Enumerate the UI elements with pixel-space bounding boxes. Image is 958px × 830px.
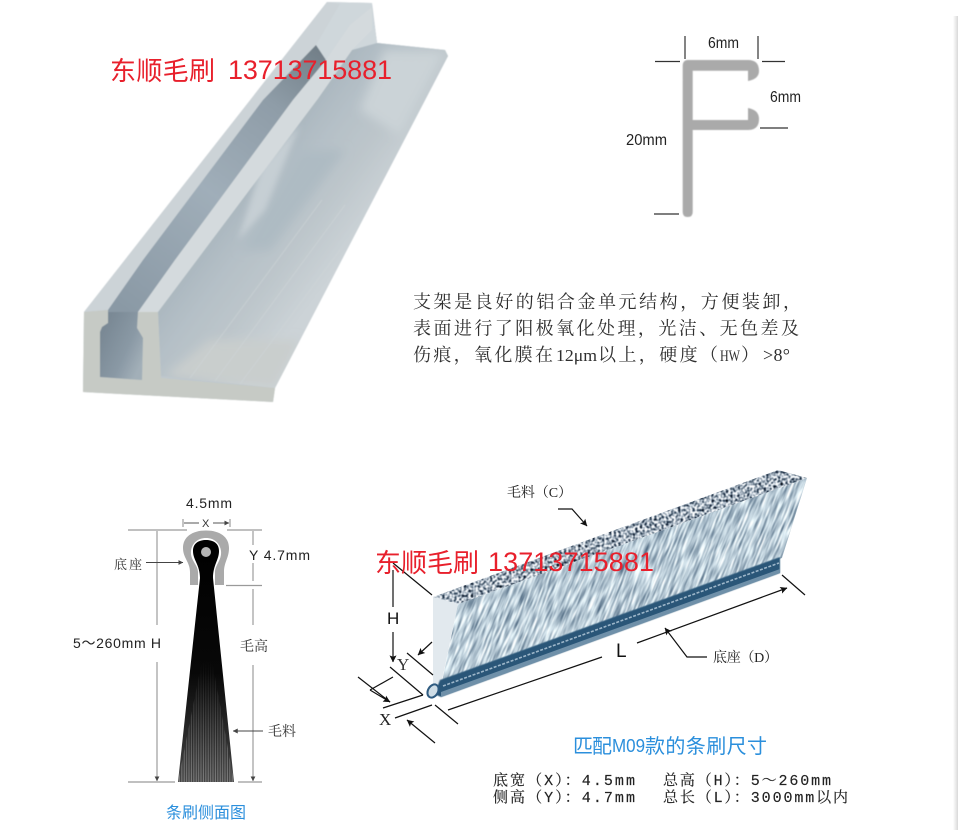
spec title: M09 bbox=[612, 736, 645, 756]
H value label: 5～260mm H bbox=[73, 635, 161, 651]
H label: H bbox=[387, 609, 399, 628]
pale streak bbox=[241, 130, 298, 234]
F-profile dimension diagram bbox=[626, 35, 801, 217]
F profile shape bbox=[683, 60, 759, 217]
20mm label: 20mm bbox=[626, 132, 667, 149]
H dimension line bbox=[156, 531, 158, 781]
dark band beside rail bbox=[256, 154, 334, 246]
Y label: Y bbox=[397, 655, 409, 674]
red watermark top: 东顺毛刷 bbox=[110, 56, 215, 86]
bristle material label: 毛料（C） bbox=[507, 485, 572, 501]
bristle strands bbox=[178, 672, 233, 782]
bristle height label: 毛高 bbox=[240, 638, 268, 655]
bristle label: 毛料 bbox=[268, 724, 296, 740]
Y value label: Y 4.7mm bbox=[249, 547, 310, 563]
red watermark top: 13713715881 bbox=[228, 55, 392, 85]
spec title: 款的条刷尺寸 bbox=[645, 735, 767, 758]
X lower arrow bbox=[407, 720, 435, 743]
rail lower band bbox=[441, 569, 780, 697]
strip assembly bbox=[426, 470, 807, 699]
spec table bbox=[493, 771, 848, 807]
base leader bbox=[665, 628, 707, 657]
spec title: 匹配 bbox=[573, 736, 612, 758]
red watermark bottom: 东顺毛刷 bbox=[375, 548, 479, 578]
end side face bbox=[433, 597, 458, 688]
far ridge bbox=[293, 2, 377, 100]
extension lines bbox=[128, 530, 262, 782]
line 3: 以上，硬度（ bbox=[598, 345, 718, 365]
line 2: 表面进行了阳极氧化处理，光洁、无色差及 bbox=[413, 318, 799, 338]
Y arrow bbox=[418, 642, 432, 655]
image: aluminium bracket profile bbox=[83, 2, 448, 402]
X label: X bbox=[379, 710, 391, 729]
line 3: HW bbox=[720, 348, 741, 365]
X width dimension: X bbox=[202, 518, 210, 530]
bristle arrow bbox=[558, 509, 587, 526]
H dimension bbox=[392, 570, 394, 662]
line 3: >8° bbox=[763, 345, 790, 365]
perspective brush strip diagram bbox=[358, 470, 807, 744]
rod hole bbox=[201, 547, 211, 557]
line 1: 支架是良好的铝合金单元结构，方便装卸， bbox=[413, 292, 801, 312]
channel slot bbox=[108, 45, 326, 324]
line 3: 伤痕，氧化膜在 bbox=[413, 345, 553, 365]
silhouette bbox=[83, 2, 448, 402]
length lines bbox=[190, 200, 345, 384]
front end face bbox=[83, 310, 275, 402]
end cap bbox=[425, 682, 441, 700]
total height spec: 总高（H）：5～260mm bbox=[663, 771, 831, 790]
cavity bbox=[100, 312, 143, 380]
L label: L bbox=[616, 641, 627, 662]
rail highlight bbox=[443, 563, 779, 686]
wing surface bbox=[158, 7, 448, 388]
bristle body bbox=[178, 540, 234, 782]
L dimension bbox=[448, 588, 787, 710]
red watermark bottom: 13713715881 bbox=[488, 547, 654, 577]
wing shading bbox=[165, 50, 445, 388]
base width spec: 底宽（X）：4.5mm bbox=[493, 771, 635, 790]
4.5mm label: 4.5mm bbox=[186, 495, 232, 511]
bristle top face bbox=[433, 470, 807, 604]
leaders and ticks bbox=[358, 563, 805, 724]
bristle arrow bbox=[233, 730, 263, 732]
holder bbox=[183, 530, 229, 585]
line 3: ） bbox=[741, 345, 759, 365]
pale lower end bbox=[174, 341, 290, 382]
dimension ticks bbox=[654, 36, 788, 214]
side height spec: 侧高（Y）：4.7mm bbox=[493, 788, 635, 807]
bristle front face bbox=[442, 478, 807, 680]
total length spec: 总长（L）：3000mm以内 bbox=[663, 789, 848, 807]
red watermark top bbox=[110, 55, 392, 86]
base label: 底座 bbox=[114, 557, 142, 572]
centre rail top bbox=[138, 7, 372, 312]
X width dimension bbox=[183, 518, 230, 530]
left rail top bbox=[84, 2, 340, 312]
6mm width label: 6mm bbox=[708, 35, 739, 52]
pale upper end bbox=[362, 48, 438, 128]
right dimension line bbox=[252, 531, 254, 781]
6mm height label: 6mm bbox=[770, 89, 801, 106]
red watermark bottom bbox=[375, 547, 654, 578]
description paragraph bbox=[413, 292, 801, 365]
base rail bbox=[434, 557, 780, 697]
caption: 条刷侧面图 bbox=[166, 804, 246, 822]
right edge shadow bbox=[953, 16, 958, 830]
spec title bbox=[573, 735, 767, 758]
line 3 bbox=[413, 345, 790, 365]
line 3: 12μm bbox=[556, 346, 597, 365]
X arrows bbox=[370, 677, 393, 702]
brush side-view diagram bbox=[73, 495, 310, 822]
base arrow bbox=[146, 562, 183, 564]
base label: 底座（D） bbox=[713, 649, 778, 666]
